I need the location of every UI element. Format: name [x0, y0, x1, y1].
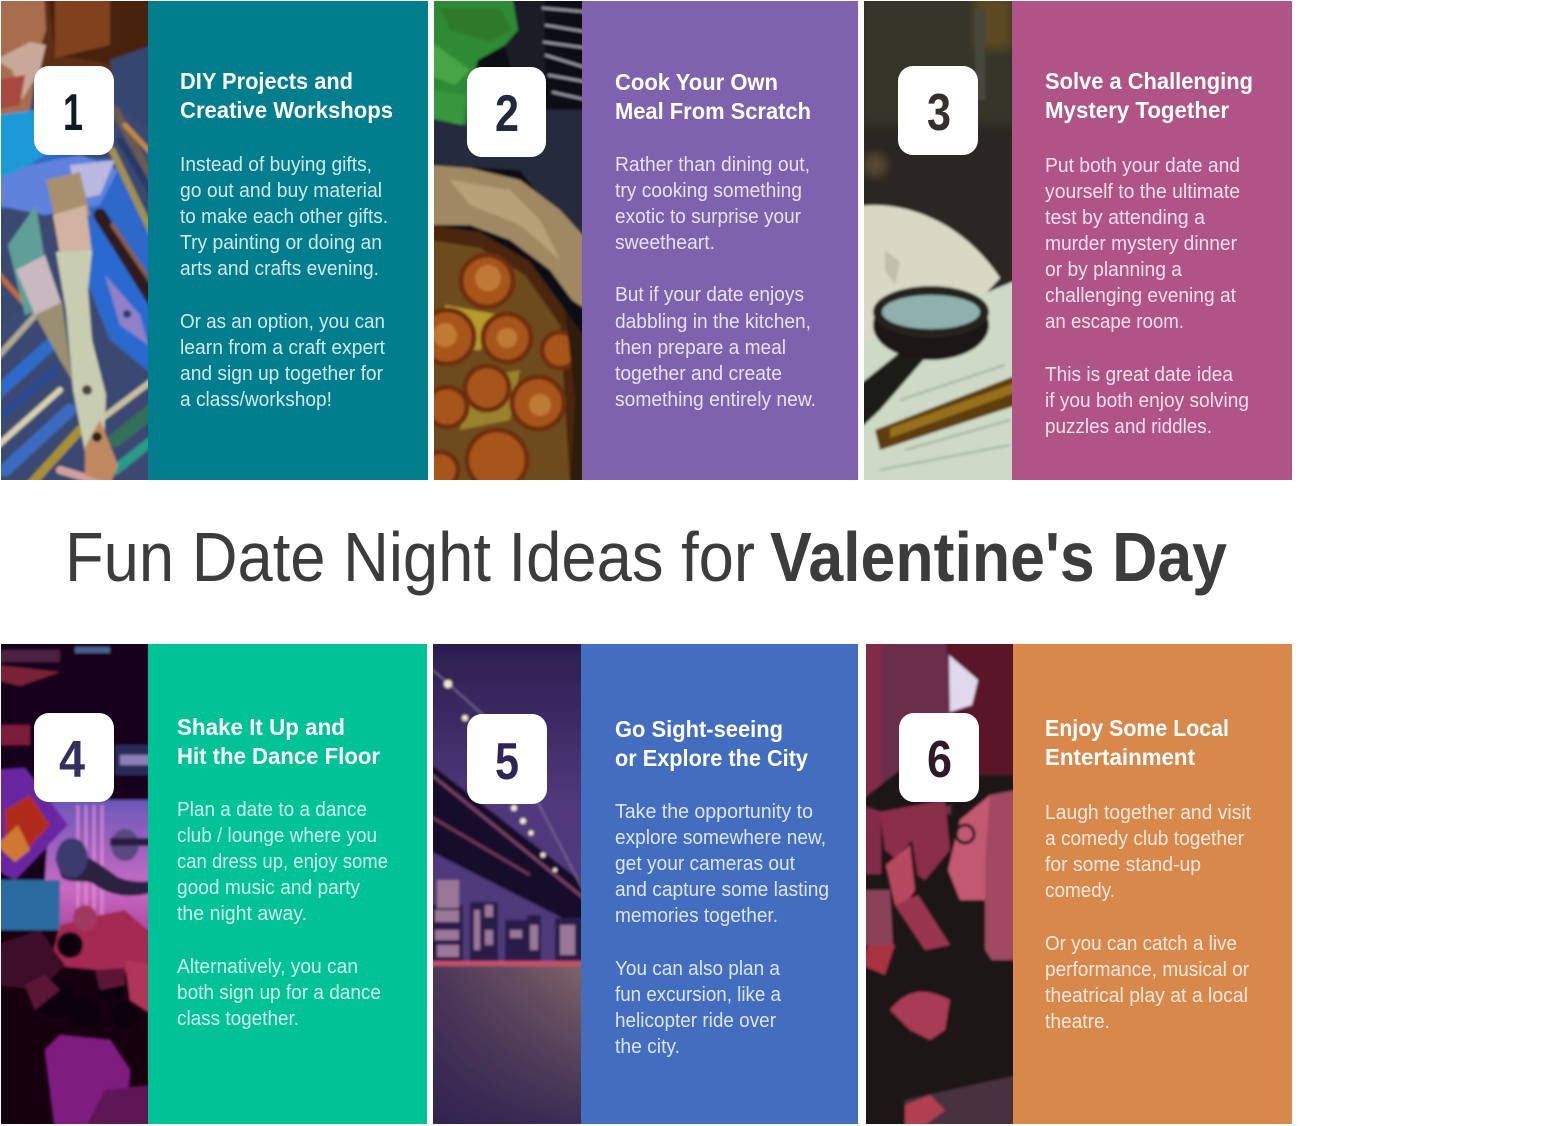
body text 6: Or you can catch a live [1045, 933, 1237, 955]
body text 1: Or as an option, you can [180, 311, 385, 333]
panel 6: local entertainment [861, 639, 1292, 1126]
image: friends laughing [861, 639, 1018, 1126]
body text 1: Try painting or doing an [180, 232, 382, 254]
body text 3: Put both your date and [1045, 155, 1240, 177]
number badge 3 [898, 66, 978, 155]
body text 5: helicopter ride over [615, 1010, 776, 1032]
body text 2: But if your date enjoys [615, 284, 804, 306]
body text 6: comedy. [1045, 880, 1115, 902]
number badge 2 [467, 67, 546, 157]
body text 2: sweetheart. [615, 232, 715, 254]
image: magnifying glass on book [859, 0, 1017, 485]
panel 4 colour block [148, 644, 427, 1124]
body text 5: get your cameras out [615, 853, 795, 875]
number badge 5 [467, 714, 547, 804]
number badge 1 [34, 66, 114, 155]
body text 2: Rather than dining out, [615, 154, 810, 176]
body text 4: Alternatively, you can [177, 956, 358, 978]
image: nightclub crowd [0, 639, 153, 1126]
heading 4: Shake It Up and [177, 714, 345, 740]
body text 6: for some stand-up [1045, 854, 1201, 876]
body text 4: class together. [177, 1008, 299, 1030]
number badge 4: 4 [59, 731, 85, 789]
panel 5 colour block [581, 644, 858, 1124]
body text 5: fun excursion, like a [615, 984, 782, 1006]
body text 4 [177, 799, 388, 1030]
body text 5: the city. [615, 1036, 680, 1058]
body text 6: a comedy club together [1045, 828, 1244, 850]
body text 1 [180, 154, 388, 411]
number badge 6: 6 [927, 731, 952, 789]
panel 1 colour block [148, 1, 428, 480]
number badge 5: 5 [495, 733, 519, 791]
number badge 6 [899, 713, 979, 802]
body text 3: if you both enjoy solving [1045, 390, 1249, 412]
body text 6 [1045, 802, 1251, 1033]
body text 6: theatre. [1045, 1011, 1110, 1033]
body text 2 [615, 154, 816, 411]
heading 5: or Explore the City [615, 745, 808, 771]
body text 6: theatrical play at a local [1045, 985, 1248, 1007]
body text 1: arts and crafts evening. [180, 258, 379, 280]
body text 2: dabbling in the kitchen, [615, 311, 811, 333]
panel 2: cook your own meal [420, 0, 858, 490]
body text 6: performance, musical or [1045, 959, 1249, 981]
image: tomato tart [434, 1, 582, 480]
title: Fun Date Night Ideas for [65, 518, 755, 596]
panel 6 colour block [1013, 644, 1292, 1124]
body text 1: and sign up together for [180, 363, 383, 385]
body text 5: and capture some lasting [615, 879, 829, 901]
body text 3: yourself to the ultimate [1045, 181, 1240, 203]
heading 6: Enjoy Some Local [1045, 715, 1229, 741]
heading 5: Go Sight-seeing [615, 716, 783, 742]
heading 1 [180, 68, 393, 123]
heading 4 [177, 714, 380, 769]
panel 2 colour block [582, 1, 858, 480]
panel 3: solve a mystery [859, 0, 1292, 485]
heading 6 [1045, 715, 1229, 770]
heading 4: Hit the Dance Floor [177, 743, 380, 769]
heading 3 [1045, 68, 1253, 123]
heading 3: Mystery Together [1045, 97, 1229, 123]
heading 3: Solve a Challenging [1045, 68, 1253, 94]
body text 3: murder mystery dinner [1045, 233, 1237, 255]
body text 5 [615, 801, 829, 1058]
number badge 2: 2 [495, 85, 519, 143]
title: Valentine's Day [770, 518, 1227, 596]
panel 1: DIY projects [0, 0, 428, 485]
body text 1: to make each other gifts. [180, 206, 388, 228]
body text 2: together and create [615, 363, 782, 385]
body text 4: the night away. [177, 903, 307, 925]
body text 3: challenging evening at [1045, 285, 1236, 307]
number badge 3: 3 [927, 84, 951, 142]
body text 1: a class/workshop! [180, 389, 332, 411]
panel 4: dance floor [0, 639, 427, 1126]
body text 4: both sign up for a dance [177, 982, 381, 1004]
body text 5: explore somewhere new, [615, 827, 826, 849]
heading 1: Creative Workshops [180, 97, 393, 123]
body text 3: or by planning a [1045, 259, 1183, 281]
panel 3 colour block [1012, 1, 1292, 480]
body text 2: exotic to surprise your [615, 206, 801, 228]
heading 1: DIY Projects and [180, 68, 353, 94]
number badge 1: 1 [63, 84, 83, 142]
body text 4: club / lounge where you [177, 825, 377, 847]
image: paintbrushes and palette [0, 0, 153, 485]
body text 1: learn from a craft expert [180, 337, 385, 359]
body text 1: go out and buy material [180, 180, 382, 202]
body text 3: puzzles and riddles. [1045, 416, 1212, 438]
body text 2: then prepare a meal [615, 337, 786, 359]
body text 3 [1045, 155, 1249, 438]
body text 5: memories together. [615, 905, 778, 927]
image: bridge at night [428, 639, 586, 1126]
panel 5: explore the city [428, 639, 858, 1126]
body text 5: You can also plan a [615, 958, 781, 980]
heading 2 [615, 69, 811, 124]
title [65, 518, 1227, 596]
heading 5 [615, 716, 808, 771]
number badge 4 [34, 713, 114, 802]
body text 6: Laugh together and visit [1045, 802, 1251, 824]
body text 4: good music and party [177, 877, 360, 899]
heading 2: Cook Your Own [615, 69, 778, 95]
body text 3: test by attending a [1045, 207, 1206, 229]
body text 3: an escape room. [1045, 311, 1184, 333]
body text 2: something entirely new. [615, 389, 816, 411]
heading 2: Meal From Scratch [615, 98, 811, 124]
heading 6: Entertainment [1045, 744, 1195, 770]
body text 4: Plan a date to a dance [177, 799, 367, 821]
body text 1: Instead of buying gifts, [180, 154, 372, 176]
body text 5: Take the opportunity to [615, 801, 813, 823]
body text 2: try cooking something [615, 180, 802, 202]
body text 4: can dress up, enjoy some [177, 851, 388, 873]
body text 3: This is great date idea [1045, 364, 1234, 386]
